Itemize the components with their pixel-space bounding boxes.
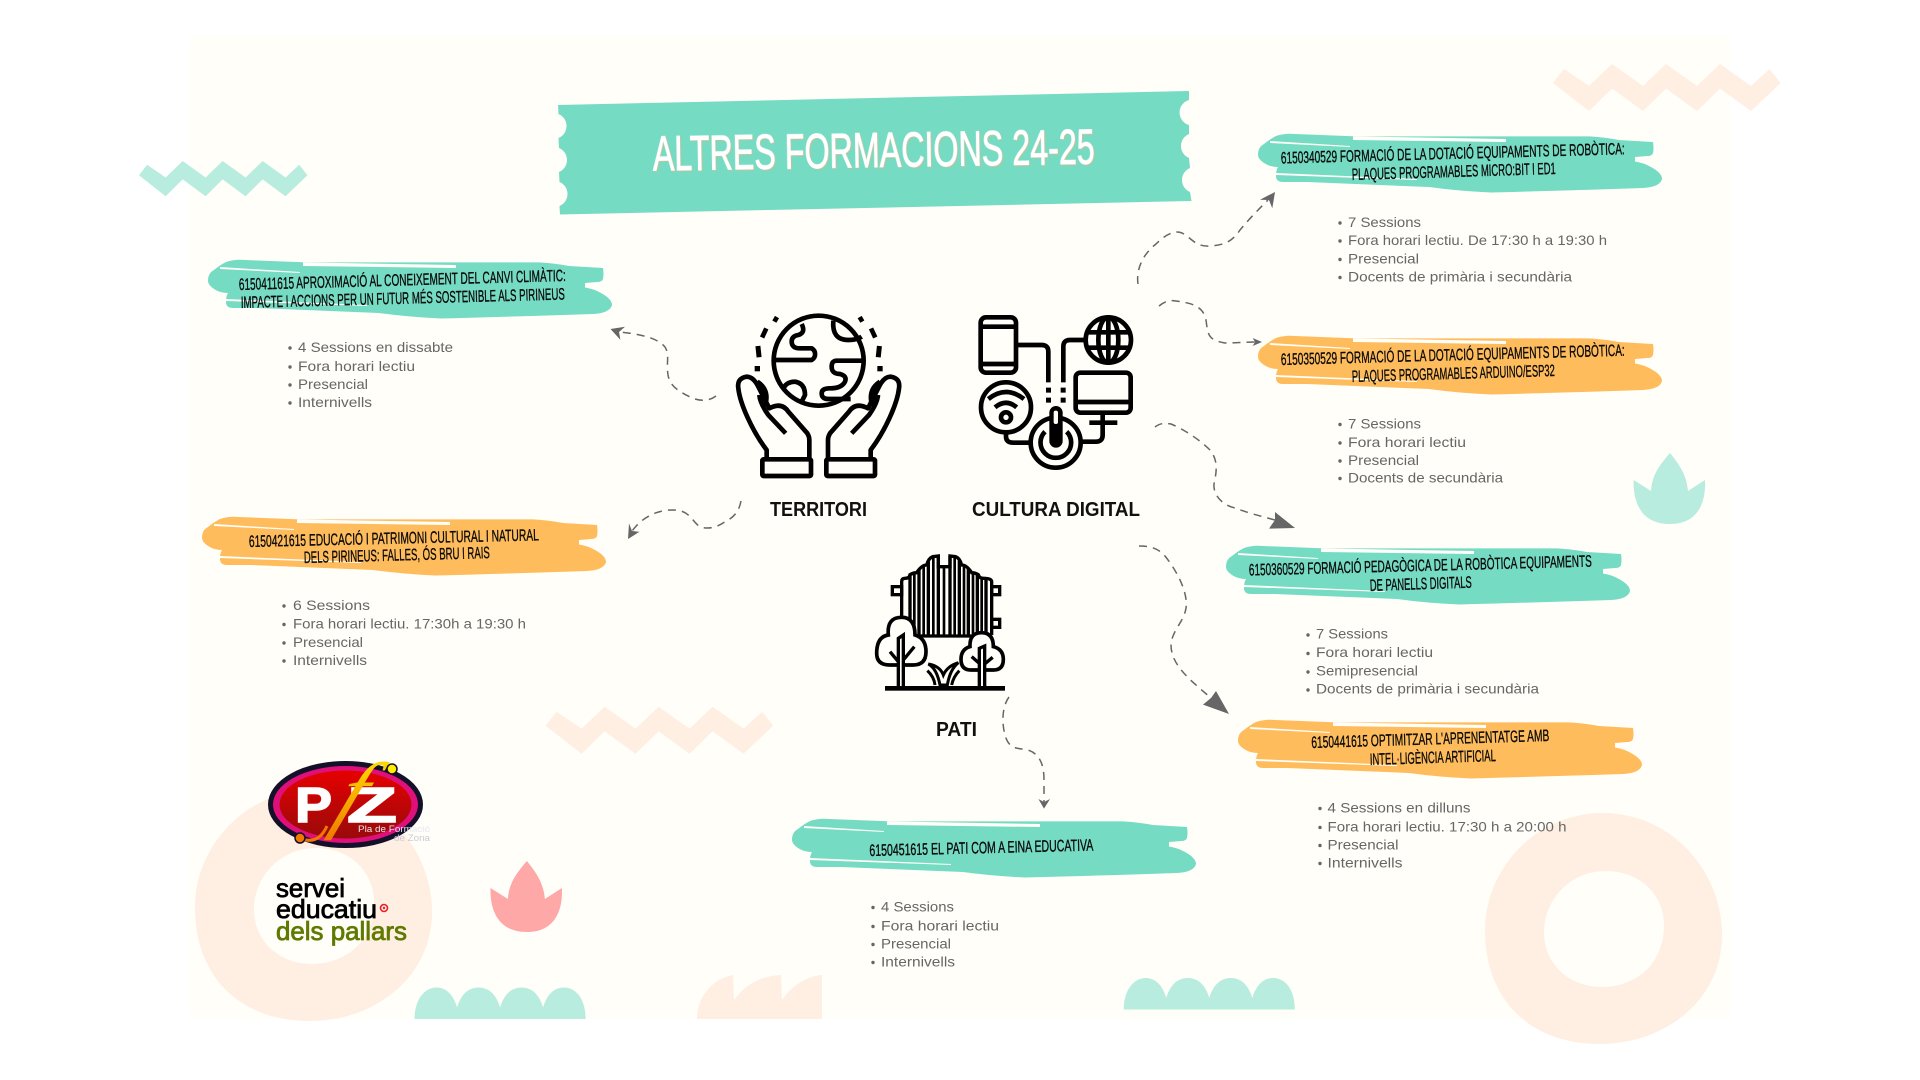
banner: climate course: IMPACTE I ACCIONS PER UN FUTUR MÉS SOSTENIBLE ALS PIRINEUS bbox=[241, 285, 565, 312]
list: cultural heritage details: Internivells bbox=[293, 652, 367, 668]
list: cultural heritage details: 6 Sessions bbox=[293, 597, 370, 613]
list: cultural heritage details bbox=[282, 597, 526, 668]
arrow: territori to climate course bbox=[610, 327, 716, 400]
list: artificial intelligence details: Presencial bbox=[1328, 836, 1398, 852]
list: climate course details: Internivells bbox=[298, 394, 372, 410]
list: schoolyard details: 4 Sessions bbox=[881, 898, 954, 914]
banner: robotics microbit course: PLAQUES PROGRAMABLES MICRO:BIT I ED1 bbox=[1352, 160, 1556, 184]
logo: PFZ: de Zona bbox=[394, 833, 430, 843]
banner: cultural heritage course bbox=[202, 517, 606, 576]
list: digital panels details: Semipresencial bbox=[1316, 662, 1418, 678]
list: schoolyard details: Fora horari lectiu bbox=[881, 918, 999, 934]
arrow: pati to schoolyard course bbox=[1003, 697, 1050, 809]
list: arduino details: Fora horari lectiu bbox=[1348, 434, 1466, 450]
list: digital panels details: Docents de primària i secundària bbox=[1316, 680, 1539, 696]
list: cultural heritage details: Fora horari lectiu. 17:30h a 19:30 h bbox=[293, 616, 526, 632]
list: microbit details: Presencial bbox=[1348, 250, 1419, 266]
list: artificial intelligence details: Internivells bbox=[1328, 854, 1402, 870]
list: climate course details: 4 Sessions en dissabte bbox=[298, 339, 453, 355]
list: arduino details: Presencial bbox=[1348, 452, 1419, 468]
list: digital panels details bbox=[1306, 626, 1539, 696]
logo: PFZ: Pla de Formació bbox=[358, 824, 430, 834]
title banner bbox=[558, 91, 1192, 214]
arrow: digital to microbit course bbox=[1138, 192, 1275, 284]
banner: artificial intelligence course: INTEL·LIGÈNCIA ARTIFICIAL bbox=[1370, 746, 1496, 769]
list: artificial intelligence details: Fora horari lectiu. 17:30 h a 20:00 h bbox=[1328, 818, 1566, 834]
logo: servei educatiu dels pallars bbox=[276, 873, 407, 946]
panel: background bbox=[190, 36, 1730, 1019]
title text: ALTRES FORMACIONS 24-25 bbox=[652, 121, 1095, 181]
logo: PFZ bbox=[270, 745, 430, 846]
list: microbit details bbox=[1338, 214, 1607, 284]
list: climate course details: Fora horari lectiu bbox=[298, 358, 415, 374]
list: digital panels details: 7 Sessions bbox=[1316, 626, 1388, 642]
list: artificial intelligence details bbox=[1318, 800, 1566, 870]
list: microbit details: Docents de primària i secundària bbox=[1348, 268, 1572, 284]
arrow: digital to arduino course bbox=[1159, 301, 1262, 346]
banner: robotics arduino course: 6150350529 FORMACIÓ DE LA DOTACIÓ EQUIPAMENTS DE ROBÒTICA: bbox=[1281, 341, 1625, 369]
list: microbit details: 7 Sessions bbox=[1348, 214, 1421, 230]
list: artificial intelligence details: 4 Sessions en dilluns bbox=[1328, 800, 1470, 816]
icon: hands holding earth bbox=[738, 316, 899, 476]
banner: artificial intelligence course: 6150441615 OPTIMITZAR L'APRENENTATGE AMB bbox=[1311, 727, 1550, 752]
logo: PFZ: P bbox=[295, 779, 332, 833]
arrow: digital to AI course bbox=[1139, 546, 1229, 714]
banner: digital panels course: DE PANELLS DIGITALS bbox=[1370, 574, 1472, 595]
banner: robotics microbit course: 6150340529 FORMACIÓ DE LA DOTACIÓ EQUIPAMENTS DE ROBÒTICA: bbox=[1281, 139, 1625, 167]
list: microbit details: Fora horari lectiu. De 17:30 h a 19:30 h bbox=[1348, 232, 1607, 248]
arrow: territori to heritage course bbox=[628, 501, 741, 539]
arrow: digital to panels course bbox=[1155, 423, 1295, 529]
heading: PATI: PATI bbox=[936, 719, 977, 741]
list: arduino details: 7 Sessions bbox=[1348, 416, 1421, 432]
banner: digital panels course: 6150360529 FORMACIÓ PEDAGÒGICA DE LA ROBÒTICA EQUIPAMENTS bbox=[1249, 552, 1592, 579]
banner: digital panels course bbox=[1226, 546, 1630, 604]
banner: artificial intelligence course bbox=[1238, 720, 1642, 778]
banner: cultural heritage course: 6150421615 EDUCACIÓ I PATRIMONI CULTURAL I NATURAL bbox=[249, 525, 539, 551]
banner: schoolyard course bbox=[792, 819, 1196, 878]
heading: CULTURA DIGITAL: CULTURA DIGITAL bbox=[972, 499, 1140, 521]
icon: schoolyard bbox=[877, 556, 1005, 691]
logo: servei educatiu dels pallars: dels pallars bbox=[276, 916, 407, 946]
banner: schoolyard course: 6150451615 EL PATI COM A EINA EDUCATIVA bbox=[869, 837, 1094, 860]
list: schoolyard details bbox=[871, 898, 999, 970]
banner: climate course bbox=[208, 260, 612, 318]
banner: robotics microbit course bbox=[1258, 134, 1662, 192]
logo: PFZ: Z bbox=[347, 779, 397, 833]
heading: TERRITORI: TERRITORI bbox=[770, 499, 867, 521]
list: climate course details bbox=[288, 339, 453, 410]
banner: cultural heritage course: DELS PIRINEUS: FALLES, ÓS BRU I RAIS bbox=[304, 543, 490, 567]
logo: servei educatiu dels pallars: educatiu bbox=[276, 894, 377, 924]
icon: digital devices bbox=[981, 317, 1131, 468]
list: schoolyard details: Presencial bbox=[881, 936, 951, 952]
decoration: shapes bbox=[139, 64, 1781, 1044]
logo: PFZ: f bbox=[322, 745, 397, 841]
banner: robotics arduino course: PLAQUES PROGRAMABLES ARDUINO/ESP32 bbox=[1352, 362, 1555, 386]
list: arduino details bbox=[1338, 416, 1503, 486]
banner: robotics arduino course bbox=[1258, 336, 1662, 394]
list: cultural heritage details: Presencial bbox=[293, 634, 363, 650]
logo: servei educatiu dels pallars: servei bbox=[276, 873, 345, 903]
list: schoolyard details: Internivells bbox=[881, 954, 955, 970]
list: climate course details: Presencial bbox=[298, 376, 368, 392]
list: arduino details: Docents de secundària bbox=[1348, 470, 1503, 486]
banner: climate course: 6150411615 APROXIMACIÓ AL CONEIXEMENT DEL CANVI CLIMÀTIC: bbox=[239, 266, 566, 294]
list: digital panels details: Fora horari lectiu bbox=[1316, 644, 1433, 660]
